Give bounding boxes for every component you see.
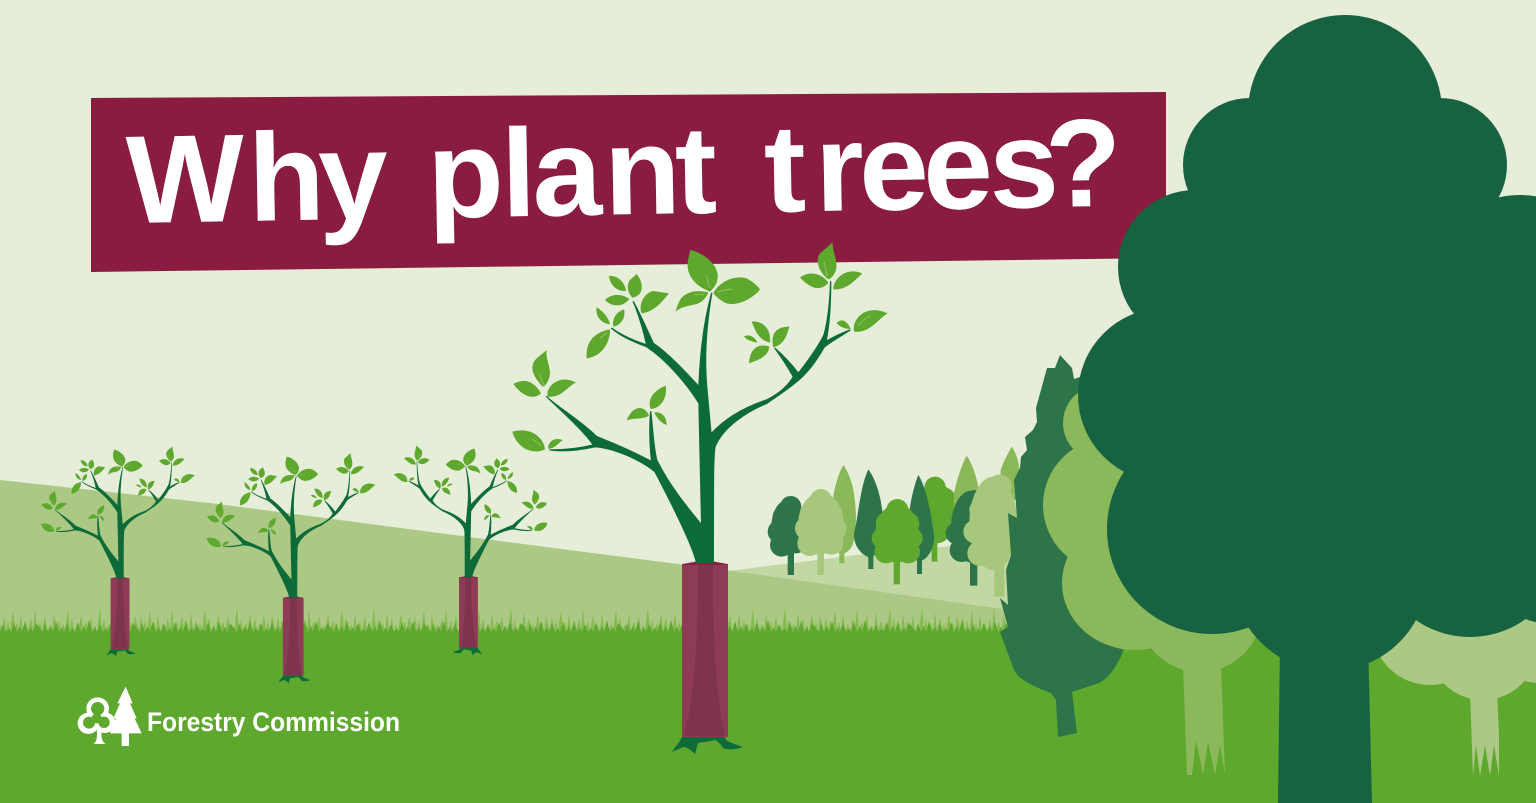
medium light tree: [1043, 385, 1262, 775]
small sapling 2: [207, 453, 375, 683]
main sapling in tree guard: [512, 242, 888, 754]
large conifer: [1000, 355, 1123, 737]
pale tree at right edge: [1372, 567, 1536, 776]
distant tree: dark round: [768, 496, 812, 575]
banner background: [91, 92, 1166, 272]
distant tree: dark round two: [946, 490, 992, 586]
small sapling 1: [41, 446, 195, 656]
near hill: [0, 480, 1010, 650]
distant tree: dark conifer: [854, 469, 883, 569]
grass fringe: [0, 606, 1030, 634]
Forestry Commission logo: [78, 687, 400, 746]
row of distant trees: [768, 447, 1020, 597]
distant tree: pale round two: [963, 474, 1017, 597]
title banner: [91, 92, 1166, 272]
distant tree: pale round: [795, 489, 847, 575]
ground: [0, 632, 1536, 803]
title text: Why plant trees?: [125, 94, 1123, 250]
distant tree: light conifer behind pale: [1000, 447, 1020, 500]
large foreground tree: [1078, 15, 1536, 803]
logo icon: oak and fir: [78, 687, 142, 746]
logo wordmark: Forestry Commission: [147, 707, 400, 737]
small sapling 3 (mirrored): [394, 445, 547, 655]
distant tree: mid green behind: [917, 477, 957, 562]
distant tree: bright green: [872, 499, 923, 584]
distant tree: light conifer: [832, 465, 856, 563]
distant tree: second dark conifer: [907, 475, 934, 574]
far hill: [728, 540, 1010, 620]
distant tree: light conifer far right: [953, 456, 979, 517]
